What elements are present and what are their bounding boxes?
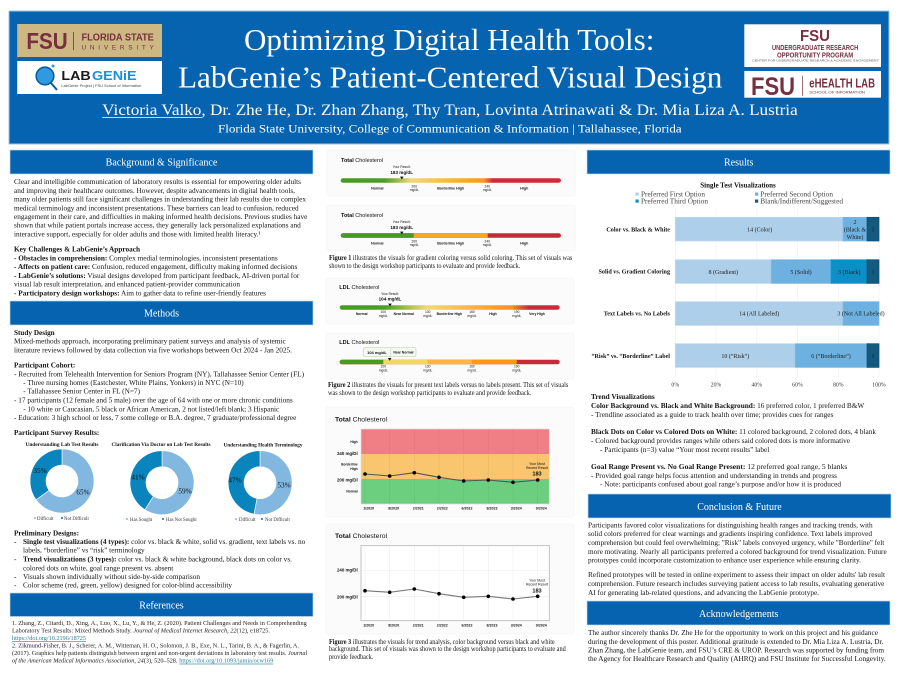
text: acknowledgements paragraph <box>588 628 886 663</box>
caption: figure 3: Figure 3 illustrates the visuals for trend analysis, color background versus black and white <box>329 637 555 646</box>
figure 2: labelled LDL bar <box>326 278 574 324</box>
figure 3: color background trend chart: 2/2022 <box>437 507 448 511</box>
text: reference list: Laboratory Test Results: Mixed Methods Study. Journal of Medical Internet Research, 22(12), e18725. <box>12 628 270 635</box>
figure 2: labelled LDL bar: mg/dL <box>379 314 388 318</box>
figure 1: gradient cholesterol bar: Total Cholesterol <box>341 158 383 164</box>
stacked bar chart: single test visualizations: 3 (Not All Labeled) <box>837 311 885 318</box>
title <box>178 23 722 94</box>
donut chart: understanding health terminology: Not Difficult <box>265 518 290 523</box>
text: key challenges: Key Challenges & LabGenie’s Approach <box>14 245 140 254</box>
figure 1: gradient cholesterol bar: High <box>520 186 528 190</box>
figure 3: color background trend chart: 240 mg/Dl <box>337 451 358 456</box>
chart legend: Blank/Indifferent/Suggested <box>760 197 843 205</box>
text: preliminary designs: colored dots on white, goal range present vs. absent <box>23 563 173 572</box>
donut chart: clarification via doctor <box>112 443 211 523</box>
figure 1: gradient cholesterol bar: mg/dL <box>410 188 419 192</box>
figure 3: color background trend chart <box>326 407 574 517</box>
figure 1: solid cholesterol bar: 183 mg/dL <box>390 225 413 230</box>
figure 2: labelled LDL bar: 190 <box>514 310 520 314</box>
stacked bar chart: single test visualizations: 60% <box>792 382 803 388</box>
figure 3: black and white trend chart <box>326 524 574 634</box>
figure 3: color background trend chart: Normal <box>346 489 358 493</box>
figure 3: color background trend chart: 200 mg/Dl <box>337 478 358 483</box>
stacked bar chart: single test visualizations: Solid vs. Gradient Coloring <box>599 270 670 276</box>
text: trend visualizations: - Note: participants confused about goal range’s purpose and/or how it is produced <box>600 480 841 488</box>
title: LabGenie’s Patient-Centered Visual Design <box>178 60 722 94</box>
text: future research paragraph <box>588 570 885 597</box>
figure 1: solid cholesterol bar: 240 <box>485 240 490 244</box>
figure 3: black and white trend chart: 9/2024 <box>536 623 547 627</box>
chart legend: Preferred Second Option <box>760 190 833 198</box>
figure 2: labelled LDL bar: Your Result: <box>381 292 399 296</box>
heading: references: References <box>139 600 184 611</box>
figure 1: solid cholesterol bar: mg/dL <box>410 243 419 247</box>
text: preliminary designs: Visuals shown individually without side-by-side comparison <box>23 572 200 581</box>
figure 3: black and white trend chart: 183 <box>532 588 542 594</box>
figure 3: color background trend chart: 1/2020 <box>363 507 374 511</box>
figure 1: solid cholesterol bar: 200 <box>412 240 417 244</box>
text: background paragraph <box>14 177 307 239</box>
figure 1: solid cholesterol bar: Borderline High <box>437 242 464 246</box>
caption: figure 2: Figure 2 illustrates the visuals for present text labels versus no labels present. This set of visuals <box>328 380 568 389</box>
figure 3: black and white trend chart: Total Cholesterol <box>335 533 387 540</box>
heading: conclusion and future <box>588 494 891 518</box>
title: Optimizing Digital Health Tools: <box>244 23 654 57</box>
text: participant cohort: Participant Cohort: <box>14 361 75 370</box>
logo: Florida State University: FLORIDA STATE <box>82 33 154 44</box>
stacked bar chart: single test visualizations: 10 (“Risk”) <box>721 353 749 360</box>
stacked bar chart: single test visualizations: 2 <box>854 220 856 226</box>
logo: eHealth Lab: SCHOOL OF INFORMATION <box>809 90 865 94</box>
figure 3: color background trend chart: High <box>350 467 358 471</box>
figure 3: color background trend chart: 6/2022 <box>462 507 472 511</box>
figure 3: color background trend chart: 8/2020 <box>388 507 399 511</box>
text: preliminary designs: - <box>14 537 17 546</box>
figure 3: color background trend chart: 2/2021 <box>413 507 424 511</box>
donut chart: understanding health terminology: Understanding Health Terminology <box>224 444 303 448</box>
text: preliminary designs: labels, “borderline” vs “risk” terminology <box>23 546 145 555</box>
text: background paragraph: engagement in their care, and difficulties in making informed health decisions. Previous studies have <box>14 212 307 221</box>
logo: Florida State University <box>17 24 162 57</box>
text: preliminary designs: Single test visualizations (4 types): color vs. black & white, solid vs. gradient, text labels vs. no <box>23 537 306 546</box>
text: background paragraph: many older patients still face significant challenges in understanding their lab results due to complex <box>14 195 306 204</box>
text: trend visualizations: Black Dots on Color vs Colored Dots on White: 11 colored background, 2 colored dots, 4 blank <box>591 427 876 436</box>
figure 3: black and white trend chart: Recent Result <box>526 582 548 586</box>
text: participant cohort: - Education: 3 high school or less, 7 some college or B.A. degree, 7 graduate/professional degree <box>14 413 296 422</box>
donut chart: clarification via doctor: 59% <box>178 488 192 496</box>
panel: figures <box>326 150 575 661</box>
figure 1: gradient cholesterol bar: 200 <box>412 184 417 188</box>
figure 3: black and white trend chart: 8/2020 <box>388 623 399 627</box>
text: participant cohort: - Tallahassee Senior Center in FL (N=7) <box>23 387 141 396</box>
stacked bar chart: single test visualizations: (Black & <box>844 227 866 234</box>
text: acknowledgements paragraph: the Agency for Healthcare Research and Quality (AHRQ) and FSU Institute for Successful Longevity. <box>588 654 886 663</box>
figure 1: gradient cholesterol bar <box>327 150 575 196</box>
figure 2: unlabelled LDL bar with pill: mg/dL <box>423 368 432 372</box>
figure 1: solid cholesterol bar: Normal <box>371 242 383 246</box>
logo: Florida State University: UNIVERSITY <box>82 44 155 51</box>
panel: references <box>10 593 313 665</box>
text: background paragraph: and improving their healthcare outcomes. However, despite advancements in digital health tools, <box>14 186 295 195</box>
caption: figure 1: shown to the design workshop participants to evaluate and provide feedback. <box>329 261 520 270</box>
text: reference list <box>12 620 308 665</box>
text: participant cohort: - Recruited from Telehealth Intervention for Seniors Program (NY), Tallahassee Senior Center (FL) <box>14 369 305 378</box>
figure 3: color background trend chart: Recent Result <box>526 466 548 470</box>
text: reference list: https://doi.org/10.2196/18725 <box>12 635 86 642</box>
panel: results <box>587 150 890 488</box>
figure 1: gradient cholesterol bar: 183 mg/dL <box>390 170 413 175</box>
heading: acknowledgements <box>587 601 890 625</box>
figure 2: unlabelled LDL bar with pill: mg/dL <box>379 368 388 372</box>
text: study design: Study Design <box>14 328 55 337</box>
figure 2: unlabelled LDL bar with pill: LDL Cholesterol <box>339 340 379 346</box>
text: conclusion paragraph: comprehension but could feel overwhelming; "Risk" labels conveyed urgency, while "Borderline" felt <box>588 538 884 547</box>
figure 2: labelled LDL bar: mg/dL <box>423 314 432 318</box>
chart legend: Preferred Third Option <box>641 197 708 205</box>
figure 3: color background trend chart: 3/2024 <box>511 507 522 511</box>
text: acknowledgements paragraph: during the development of this poster. Additional gratitude is extended to Dr. Mia Liza A. Lustria, Dr. <box>588 637 883 646</box>
figure 2: labelled LDL bar: LDL Cholesterol <box>339 285 379 291</box>
text: background paragraph: shown that while patient portals increase access, they generally lack personalized explanations and <box>14 221 301 230</box>
logo: LabGenie: LAB <box>61 69 91 83</box>
caption: figure 1 <box>329 253 572 270</box>
logo: LabGenie <box>17 61 162 94</box>
donut chart: understanding lab test results: 65% <box>76 488 90 496</box>
text: trend visualizations: Color Background vs. Black and White Background: 16 preferred color, 1 preferred B&W <box>591 401 864 410</box>
figure 2: unlabelled LDL bar with pill: mg/dL <box>467 368 477 372</box>
stacked bar chart: single test visualizations: Text Labels vs. No Labels <box>604 312 671 318</box>
text: trend visualizations: - Trendline associated as a guide to track health over time; provides cues for ranges <box>591 410 833 419</box>
figure 3: color background trend chart: Borderline <box>341 462 358 466</box>
text: study design: literature reviews followed by data collection via five workshops between Oct 2024 - Jan 2025. <box>14 345 292 354</box>
donut chart: understanding lab test results: Difficult <box>37 517 54 522</box>
stacked bar chart: single test visualizations: 8 (Gradient) <box>709 269 738 276</box>
panel: methods <box>10 301 313 590</box>
logo: eHealth Lab <box>744 71 881 101</box>
heading: acknowledgements: Acknowledgements <box>699 609 779 620</box>
text: reference list: 1. Zhang, Z., Citardi, D., Xing, A., Luo, X., Lu, Y., & He, Z. (2020). Patient Challenges and Needs in Comprehending <box>12 620 307 627</box>
stacked bar chart: single test visualizations <box>591 182 886 388</box>
stacked bar chart: single test visualizations: “Risk” vs. “Borderline” Label <box>591 354 670 360</box>
stacked bar chart: single test visualizations: 20% <box>711 382 721 388</box>
text: participant cohort: - 10 white or Caucasian, 5 black or African American, 2 not listed/left blank; 3 Hispanic <box>23 404 280 413</box>
figure 2: unlabelled LDL bar with pill: 190 <box>514 365 520 369</box>
donut chart: clarification via doctor: Has Sought <box>130 518 153 523</box>
text: trend visualizations: Goal Range Present vs. No Goal Range Present: 12 preferred goal range, 5 blanks <box>591 462 847 471</box>
chart legend <box>636 190 843 205</box>
figure 2: labelled LDL bar: 160 <box>469 310 475 314</box>
header banner <box>9 11 889 144</box>
donut chart: understanding health terminology: 53% <box>277 482 291 490</box>
figure 2: unlabelled LDL bar with pill: 100 <box>381 365 386 369</box>
text: study design <box>14 328 292 354</box>
figure 3: color background trend chart: Your Most <box>529 462 545 466</box>
text: trend visualizations: - Provided goal range helps focus attention and understanding in trends and progress <box>591 471 837 480</box>
text: trend visualizations: - Colored background provides ranges while others said colored dots is more informative <box>591 436 850 445</box>
stacked bar chart: single test visualizations: 1 <box>872 228 874 234</box>
figure 3: black and white trend chart: 3/2024 <box>511 623 522 627</box>
stacked bar chart: single test visualizations: Single Test Visualizations <box>700 182 776 190</box>
figure 2: labelled LDL bar: Near Normal <box>394 312 414 316</box>
figure 3: color background trend chart: 183 <box>532 472 542 478</box>
stacked bar chart: single test visualizations: 5 (Solid) <box>790 269 812 276</box>
figure 1: solid cholesterol bar: Your Result: <box>393 220 411 224</box>
text: conclusion paragraph: Participants favored color visualizations for distinguishing health ranges and tracking trends, with <box>588 520 873 530</box>
donut chart: understanding lab test results: Understanding Lab Test Results <box>26 443 99 448</box>
figure 2: unlabelled LDL bar with pill: 104 mg/dL <box>367 350 387 355</box>
figure 1: gradient cholesterol bar: Borderline High <box>437 186 464 190</box>
heading: participant survey results: Participant Survey Results: <box>14 428 99 437</box>
figure 3: color background trend chart: 8/2023 <box>486 507 498 511</box>
stacked bar chart: single test visualizations: 14 (Color) <box>747 227 772 234</box>
stacked bar chart: single test visualizations: 0% <box>671 382 679 388</box>
heading: results: Results <box>724 158 754 168</box>
figure 1: gradient cholesterol bar: Your Result: <box>393 165 411 169</box>
heading: background and significance <box>10 150 313 174</box>
figure 3: black and white trend chart: 240 mg/Dl <box>337 568 358 573</box>
figure 3: black and white trend chart: 8/2023 <box>486 623 498 627</box>
figure 2: unlabelled LDL bar with pill: mg/dL <box>512 368 521 372</box>
heading: conclusion and future: Conclusion & Future <box>697 502 782 513</box>
text: participant cohort: - Three nursing homes (Eastchester, White Plains, Yonkers) in NYC (N=10) <box>23 378 244 387</box>
stacked bar chart: single test visualizations: 1 <box>872 270 874 276</box>
logo: LabGenie: LabGenie Project | FSU School of Information <box>61 84 142 88</box>
caption: figure 2: was shown to the design workshop participants to evaluate and provide feedback. <box>328 388 531 397</box>
stacked bar chart: single test visualizations: 6 (“Borderline”) <box>811 353 851 360</box>
authors: Victoria Valko, Dr. Zhe He, Dr. Zhan Zhang, Thy Tran, Lovinta Atrinawati & Dr. Mia Liza A. Lustria <box>102 102 798 119</box>
text: key challenges: - Participatory design workshops: Aim to gather data to refine user-friendly features <box>14 288 266 297</box>
text: acknowledgements paragraph: The author sincerely thanks Dr. Zhe He for the opportunity to work on this project and his guidance <box>588 628 878 637</box>
text: preliminary designs: Color scheme (red, green, yellow) designed for color-blind accessibility <box>23 581 232 590</box>
figure 3: color background trend chart: Total Cholesterol <box>335 416 387 424</box>
text: background paragraph: interactive support, especially for older adults and those with limited health literacy.¹ <box>14 230 261 239</box>
stacked bar chart: single test visualizations: 40% <box>751 382 762 388</box>
figure 1: solid cholesterol bar: Total Cholesterol <box>341 213 383 219</box>
figure 2: labelled LDL bar: mg/dL <box>512 314 521 318</box>
donut chart: understanding health terminology: 47% <box>228 476 242 484</box>
figure 2: labelled LDL bar: mg/dL <box>467 314 477 318</box>
logo: undergraduate research opportunity program: UNDERGRADUATE RESEARCH <box>772 43 858 52</box>
text: conclusion paragraph <box>588 520 887 564</box>
logo: Florida State University: FSU <box>26 28 68 54</box>
heading: methods: Methods <box>144 308 179 320</box>
heading: results <box>587 150 890 174</box>
logo: eHealth Lab: FSU <box>751 73 795 101</box>
heading: references <box>10 593 313 616</box>
text: preliminary designs: Preliminary Designs: <box>14 528 79 537</box>
text: reference list: https://doi.org/10.1093/jamia/ocw169 <box>179 658 273 665</box>
figure 2: unlabelled LDL bar with pill: 130 <box>425 365 431 369</box>
donut chart: clarification via doctor: Clarification Via Doctor on Lab Test Results <box>112 443 211 448</box>
figure 2: labelled LDL bar: Very High <box>529 312 545 316</box>
text: background paragraph: Clear and intelligible communication of laboratory results is essential for empowering older adults <box>14 177 301 186</box>
logo: eHealth Lab: eHEALTH LAB <box>809 77 875 91</box>
panel: acknowledgements <box>587 601 890 663</box>
figure 2: labelled LDL bar: High <box>489 312 497 316</box>
affiliation: Florida State University, College of Communication & Information | Tallahassee, Florida <box>218 121 682 135</box>
donut chart: understanding health terminology <box>224 444 303 523</box>
figure 2: unlabelled LDL bar with pill <box>326 333 574 379</box>
stacked bar chart: single test visualizations: 80% <box>833 382 844 388</box>
text: participant cohort <box>14 361 305 422</box>
caption: figure 2 <box>328 380 568 397</box>
text: study design: Mixed-methods approach, incorporating preliminary patient surveys and analysis of systemic <box>14 337 286 346</box>
text: key challenges: - Obstacles in comprehension: Complex medial terminologies, inconsistent presentations <box>14 253 278 262</box>
figure 3: black and white trend chart: 2/2022 <box>437 623 448 627</box>
panel: conclusion and future <box>588 494 891 597</box>
logo: LabGenie: GENiE <box>92 69 137 83</box>
figure 3: color background trend chart: 9/2024 <box>536 507 547 511</box>
text: conclusion paragraph: prototypes could incorporate customization to enhance user experience while ensuring clarity. <box>588 556 861 564</box>
text: participant cohort: - 17 participants (12 female and 5 male) over the age of 64 with one or more chronic conditions <box>14 396 293 405</box>
text: trend visualizations: - Participants (n=3) value “Your most recent results” label <box>600 445 769 454</box>
caption: figure 3: background. This set of visuals was shown to the design workshop participants to evaluate and <box>329 644 566 653</box>
figure 1: gradient cholesterol bar: 240 <box>485 184 490 188</box>
donut chart: clarification via doctor: Has Not Sought <box>166 518 197 523</box>
figure 3: black and white trend chart: 6/2022 <box>462 623 472 627</box>
figure 2: unlabelled LDL bar with pill: 160 <box>469 365 475 369</box>
text: future research paragraph: comprehension. Future research includes surveying patient access to lab results, evaluating generative <box>588 579 884 588</box>
donut chart: understanding lab test results <box>26 443 99 522</box>
figure 2: unlabelled LDL bar with pill: Near Normal <box>393 351 414 355</box>
figure 3: black and white trend chart: Your Most <box>529 578 545 582</box>
stacked bar chart: single test visualizations: White) <box>847 234 863 241</box>
text: conclusion paragraph: more motivating. Nearly all participants preferred a colored background for trend visualization. Future <box>588 547 887 556</box>
stacked bar chart: single test visualizations: 14 (All Labeled) <box>739 311 779 318</box>
donut chart: understanding lab test results: Not Difficult <box>64 517 89 522</box>
stacked bar chart: single test visualizations: 3 (Black) <box>838 269 861 276</box>
caption: figure 3: provide feedback. <box>329 652 373 661</box>
text: preliminary designs <box>14 528 306 590</box>
text: preliminary designs: - <box>14 581 17 590</box>
text: background paragraph: medical terminology and inconsistent presentations. These barriers can lead to confusion, reduced <box>14 203 299 212</box>
text: trend visualizations <box>591 392 876 488</box>
donut chart: understanding lab test results: 35% <box>33 467 47 475</box>
logo: undergraduate research opportunity program: CENTER FOR UNDERGRADUATE RESEARCH & ACADEMIC ENGAGEMENT <box>752 59 879 63</box>
heading: background and significance: Background & Significance <box>106 158 218 168</box>
heading: methods <box>10 301 313 325</box>
figure 3: color background trend chart: High <box>350 440 358 444</box>
text: key challenges <box>14 245 300 297</box>
figure 1: gradient cholesterol bar: Normal <box>371 186 383 190</box>
logo: undergraduate research opportunity program <box>744 24 881 67</box>
donut chart: understanding health terminology: Difficult <box>239 518 256 523</box>
text: preliminary designs: - <box>14 572 17 581</box>
text: preliminary designs: - <box>14 554 17 563</box>
text: reference list: of the American Medical Informatics Association, 24(3), 520–528. <box>12 658 178 665</box>
stacked bar chart: single test visualizations: 1 <box>872 354 874 360</box>
text: key challenges: - LabGenie’s solutions: Visual designs developed from participant feedback, AI-driven portal for <box>14 271 300 280</box>
text: key challenges: visual lab result interpretation, and enhanced patient-provider communication <box>14 280 240 289</box>
logo: undergraduate research opportunity program: OPPORTUNITY PROGRAM <box>777 50 853 59</box>
text: future research paragraph: Refined prototypes will be tested in online experiment to assess their impact on older adults' lab result <box>588 570 885 579</box>
text: acknowledgements paragraph: Zhan Zhang, the LabGenie team, and FSU’s CRE & UROP. Research was supported by funding from <box>588 646 884 654</box>
text: key challenges: - Affects on patient care: Confusion, reduced engagement, difficulty making informed decisions <box>14 262 297 271</box>
figure 3: black and white trend chart: 200 mg/Dl <box>337 594 358 599</box>
stacked bar chart: single test visualizations: 100% <box>872 382 886 388</box>
text: preliminary designs: Trend visualizations (3 types): color vs. black & white background, black dots on color vs. <box>23 554 292 563</box>
panel: background and significance <box>10 150 313 297</box>
text: reference list: (2017). Graphics help patients distinguish between urgent and non-urgent deviations in laboratory test results. Journal <box>12 650 308 657</box>
figure 2: labelled LDL bar: Normal <box>356 312 368 316</box>
figure 2: labelled LDL bar: 130 <box>425 310 431 314</box>
caption: figure 3 <box>329 637 566 661</box>
figure 1: solid cholesterol bar: mg/dL <box>483 243 492 247</box>
figure 2: labelled LDL bar: 100 <box>381 310 386 314</box>
chart legend: Preferred First Option <box>641 190 705 198</box>
logo: undergraduate research opportunity program: FSU <box>800 28 830 45</box>
donut chart: clarification via doctor: 41% <box>131 474 145 482</box>
caption: figure 1: Figure 1 illustrates the visuals for gradient coloring versus solid coloring. This set of visuals was <box>329 253 572 262</box>
figure 3: black and white trend chart: 2/2021 <box>413 623 424 627</box>
figure 2: labelled LDL bar: Borderline High <box>437 312 462 316</box>
text: future research paragraph: AI for generating lab-related questions, and advancing the LabGenie prototype. <box>588 588 819 597</box>
text: trend visualizations: Trend Visualizations <box>591 392 655 401</box>
text: conclusion paragraph: solid colors preferred for clear warnings and gradients inspiring confidence. Text labels improved <box>588 529 872 538</box>
figure 3: black and white trend chart: 1/2020 <box>363 623 374 627</box>
text: reference list: 2. Zikmund-Fisher, B. J., Scherer, A. M., Witteman, H. O., Solomon, J. B., Exe, N. L., Tarini, B. A., & Fagerlin, A. <box>12 642 299 649</box>
figure 2: labelled LDL bar: 104 mg/dL <box>379 297 402 302</box>
stacked bar chart: single test visualizations: Color vs. Black & White <box>606 228 670 234</box>
figure 1: solid cholesterol bar: High <box>520 242 528 246</box>
figure 1: gradient cholesterol bar: mg/dL <box>483 188 492 192</box>
figure 1: solid cholesterol bar <box>327 205 575 251</box>
